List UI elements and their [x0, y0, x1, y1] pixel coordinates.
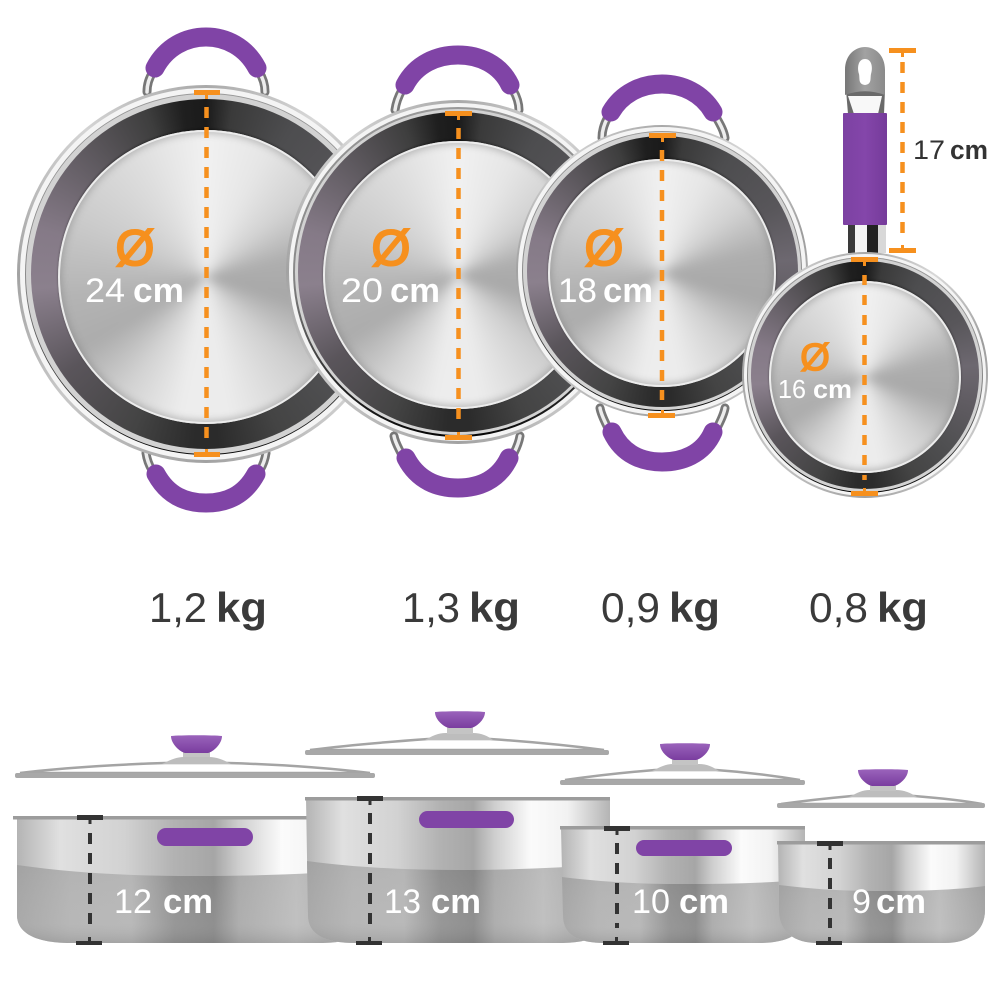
- panel: pot 9 cm: [777, 769, 985, 943]
- weight: 0,8 kg: kg: [877, 584, 928, 631]
- icon: pot 12 cm lid: [15, 735, 375, 778]
- label: 24 cm: 24: [85, 272, 125, 310]
- panel: pan 24 cm: [17, 28, 345, 512]
- pot 12 cm body: [13, 816, 377, 943]
- measure: pot 9 cm height line: [816, 841, 843, 945]
- measure: pot 13 cm height line: [356, 796, 383, 945]
- measure: saucepan 16 cm diameter line: [851, 257, 878, 496]
- label: 10 cm: cm: [679, 883, 729, 921]
- label: handle length 17 cm: 17: [913, 135, 945, 165]
- panel: pan 20 cm: [286, 46, 581, 498]
- label: 9 cm: 9: [852, 883, 871, 921]
- pan 24 cm body: [17, 85, 395, 463]
- label: handle length 17 cm: cm: [950, 135, 988, 165]
- icon: pan 24 cm handles: [142, 28, 270, 512]
- measure: pot 12 cm height line: [76, 815, 103, 945]
- saucepan body: [742, 252, 988, 498]
- weight: 1,2 kg: kg: [216, 584, 267, 631]
- icon: pot 13 cm lid: [305, 711, 609, 755]
- weight: 1,3 kg: kg: [469, 584, 520, 631]
- label: 24 cm: cm: [133, 272, 184, 310]
- label: 9 cm: cm: [876, 883, 926, 921]
- panel: pot 10 cm: [560, 743, 805, 943]
- label: diameter symbol pan 16: Ø: [800, 337, 830, 379]
- pot 13 cm body: [305, 797, 610, 943]
- label: 13 cm: 13: [384, 883, 421, 921]
- pot 12 cm side handle: [157, 828, 253, 846]
- pot 13 cm side handle: [419, 811, 514, 828]
- icon: long purple handle: [843, 47, 887, 253]
- icon: pot 10 cm lid: [560, 743, 805, 785]
- panel: pot 13 cm: [305, 711, 610, 943]
- label: 10 cm: 10: [632, 883, 670, 921]
- measure: pan 18 cm diameter line: [648, 133, 676, 418]
- panel: pan 18 cm: [516, 74, 808, 472]
- pot 9 cm body: [777, 841, 985, 943]
- weight: 1,2 kg: 1,2: [149, 584, 207, 631]
- weight: 0,9 kg: kg: [669, 584, 720, 631]
- label: diameter symbol pan 20: Ø: [372, 220, 410, 276]
- label: 12 cm: cm: [163, 883, 213, 921]
- label: 18 cm: cm: [603, 272, 653, 310]
- weight: 1,3 kg: 1,3: [402, 584, 460, 631]
- pot 10 cm side handle: [636, 840, 732, 856]
- panel: pot 12 cm: [13, 735, 375, 943]
- pot 10 cm body: [560, 826, 805, 943]
- label: diameter symbol pan 24: Ø: [116, 220, 154, 276]
- measure: pan 24 cm diameter line: [194, 90, 220, 457]
- label: 20 cm: 20: [341, 272, 383, 310]
- panel: saucepan 16 cm: [742, 47, 988, 498]
- measure: pot 10 cm height line: [603, 826, 630, 945]
- label: 13 cm: cm: [431, 883, 481, 921]
- icon: pan 20 cm handles: [390, 46, 524, 498]
- pan 20 cm body: [286, 100, 630, 444]
- measure: pan 20 cm diameter line: [445, 111, 472, 440]
- weight: 0,8 kg: 0,8: [809, 584, 868, 631]
- icon: pan 18 cm handles: [596, 74, 730, 472]
- icon: pot 9 cm lid: [777, 769, 985, 808]
- pan 18 cm body: [516, 125, 808, 417]
- weight: 0,9 kg: 0,9: [601, 584, 660, 631]
- label: 18 cm: 18: [558, 272, 597, 310]
- label: diameter symbol pan 18: Ø: [585, 220, 623, 276]
- label: 16 cm: 16: [778, 374, 806, 404]
- measure: handle length line: [889, 48, 916, 253]
- label: 20 cm: cm: [390, 272, 440, 310]
- label: 16 cm: cm: [813, 374, 852, 404]
- label: 12 cm: 12: [114, 883, 152, 921]
